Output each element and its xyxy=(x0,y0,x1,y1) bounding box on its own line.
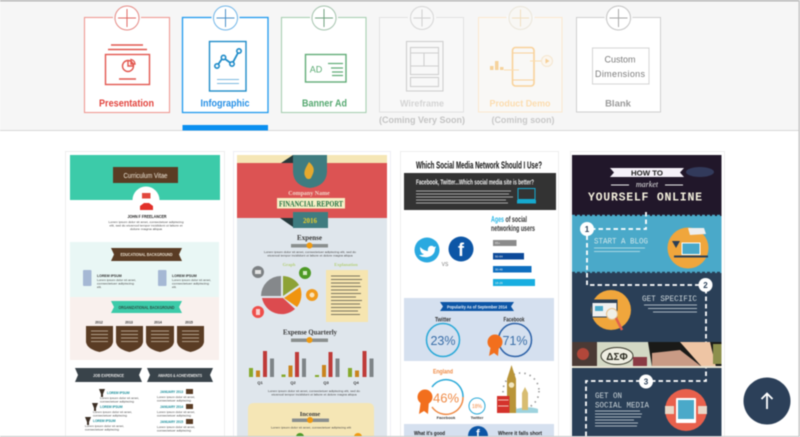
bar chart: ages: Ages of social xyxy=(491,215,527,224)
explanation box xyxy=(326,262,368,322)
section: experience and awards: consectetuer adipiscing xyxy=(157,414,191,418)
dashed route with step markers: 3 xyxy=(644,378,649,386)
section: get on social media xyxy=(595,389,707,431)
panel: good and short: What it's good xyxy=(414,431,445,437)
icon: phone with chart xyxy=(490,48,552,86)
icon: plus circle xyxy=(506,6,534,30)
dark header: HOW TO xyxy=(631,170,664,178)
section: experience and awards: consectetuer adipiscing xyxy=(157,428,191,432)
template: Social Media Network xyxy=(400,152,558,437)
bar chart: ages xyxy=(491,215,535,286)
dark intro box xyxy=(404,173,556,210)
template: Curriculum Vitae xyxy=(66,152,224,437)
section: education: consectetuer adipiscing xyxy=(172,282,209,286)
name and intro: JOHN F FREELANCER xyxy=(128,214,167,219)
section: experience and awards: JANUARY 2013 xyxy=(160,390,183,394)
vs label: VS xyxy=(442,262,449,268)
label: Banner Ad: Banner Ad xyxy=(302,98,347,110)
name and intro: Lorem ipsum dolor sit amet, consectetuer adipiscing xyxy=(108,220,184,224)
name and intro: dolore magna aliqua xyxy=(130,227,162,231)
section: experience and awards: consectetuer adipiscing xyxy=(93,414,127,418)
section: start a blog xyxy=(572,216,722,273)
dark header: YOURSELF ONLINE xyxy=(588,192,702,204)
section: experience and awards: JANUARY 2015 xyxy=(160,420,183,424)
card: Presentation xyxy=(84,6,170,112)
section: education: EDUCATIONAL BACKGROUND xyxy=(120,252,173,257)
section: education: elit. xyxy=(97,285,102,289)
header toolbar xyxy=(0,0,800,131)
section: get on social media: GET ON xyxy=(595,392,622,401)
title ribbon xyxy=(113,167,178,183)
section: get on social media: SOCIAL MEDIA xyxy=(595,402,649,410)
England statistics: England xyxy=(433,368,453,376)
section: experience and awards: JANUARY 2014 xyxy=(160,405,183,409)
icon: plus circle xyxy=(212,6,240,30)
bar chart: ages: networking users xyxy=(491,224,535,233)
section: organizational: 2013 xyxy=(125,320,133,324)
section: experience and awards: JOB EXPERIENCE xyxy=(93,373,124,378)
section: education: Lorem ipsum dolor sit amet, xyxy=(172,278,211,282)
report title: FINANCIAL REPORT xyxy=(279,198,343,208)
name and intro xyxy=(108,214,184,231)
section: experience and awards: AWARDS & ACHIEVEMENTS xyxy=(158,373,202,378)
label: Blank: Blank xyxy=(605,98,632,110)
report title xyxy=(277,191,345,208)
section: organizational: 2012 xyxy=(95,320,103,324)
section: organizational xyxy=(70,297,219,360)
icon: plus circle xyxy=(310,6,338,30)
teal header xyxy=(70,155,220,200)
heading: Expense: eiusmod tempor incididunt ut labore et dolore magna aliqua xyxy=(268,254,353,258)
illustration: London skyline xyxy=(497,365,539,413)
card: Infographic (active) xyxy=(182,6,268,112)
year tag: 2016 xyxy=(303,217,318,225)
bar chart: ages: 30-49 xyxy=(495,268,503,272)
England statistics: Twitter xyxy=(471,415,484,420)
section: education xyxy=(70,242,219,297)
card: Product Demo (disabled) xyxy=(478,6,562,126)
icon: facebook: f xyxy=(458,240,465,260)
bar chart: ages: 65+ xyxy=(495,241,500,245)
heading: Expense Quarterly: Expense Quarterly xyxy=(283,328,337,336)
income panel: Lorem ipsum dolor sit amet, consectetuer adipiscing elit xyxy=(271,426,351,430)
panel: popularity: 23% xyxy=(430,334,456,348)
section: education: LOREM IPSUM xyxy=(97,274,122,278)
section: organizational: 2014 xyxy=(154,320,162,324)
teal shield with flame xyxy=(281,155,327,188)
pie chart: Graph xyxy=(283,262,296,267)
panel: popularity: Popularity As of September 2014 xyxy=(447,304,507,310)
label: Infographic: Infographic xyxy=(200,98,250,110)
heading: Expense: Expense xyxy=(297,234,322,242)
bar chart: quarterly expense: Q3 xyxy=(323,380,329,385)
bar chart: quarterly expense: Q2 xyxy=(290,380,296,385)
panel: popularity xyxy=(404,298,554,361)
section: experience and awards: Lorem ipsum dolor sit amet, xyxy=(157,395,195,399)
dashed route with step markers: 1 xyxy=(585,225,590,234)
England statistics xyxy=(418,368,485,420)
England statistics: 18% xyxy=(472,404,483,410)
section: experience and awards: Lorem ipsum dolor sit amet, xyxy=(157,410,195,414)
custom dimensions box: Custom xyxy=(604,54,636,64)
label: coming soon: (Coming soon) xyxy=(492,115,554,126)
section: experience and awards: Lorem ipsum dolor sit amet, xyxy=(85,424,124,428)
panel: popularity: Facebook xyxy=(504,318,525,324)
section: education: elit. xyxy=(172,285,177,289)
title ribbon: Curriculum Vitae xyxy=(124,171,168,180)
section: start a blog: START A BLOG xyxy=(594,238,648,246)
icon: twitter xyxy=(414,238,440,262)
template: Financial Report xyxy=(234,152,390,437)
section: education: consectetuer adipiscing xyxy=(97,282,134,286)
dashed route with step markers: 2 xyxy=(703,281,708,290)
title: Which Social Media Network Should I Use? xyxy=(416,160,542,172)
bar chart: quarterly expense: Lorem ipsum dolor sit amet, consectetuer adipiscing elit, sed do xyxy=(268,389,360,393)
card: Wireframe (disabled) xyxy=(379,6,465,126)
panel: good and short xyxy=(404,424,554,437)
section: education: Lorem ipsum dolor sit amet, xyxy=(97,278,136,282)
heading: Expense: Lorem ipsum dolor sit amet, consectetuer adipiscing elit, sed do xyxy=(264,250,356,254)
label: Wireframe: Wireframe xyxy=(400,98,444,110)
card: Blank xyxy=(576,6,660,112)
section: experience and awards: consectetuer adipiscing xyxy=(85,428,119,432)
label: coming very soon: (Coming Very Soon) xyxy=(379,115,465,126)
section: organizational: 2015 xyxy=(185,320,193,324)
icon: ad banner: AD xyxy=(310,64,323,74)
section: experience and awards: consectetuer adipiscing xyxy=(100,400,134,404)
section: experience and awards xyxy=(75,368,213,432)
bar chart: ages: 50-64 xyxy=(495,254,503,258)
icon: line chart document xyxy=(210,42,246,91)
photo strip xyxy=(572,342,722,368)
icon: plus circle xyxy=(408,6,436,30)
panel: popularity: 71% xyxy=(502,334,528,348)
label: Presentation: Presentation xyxy=(99,98,154,110)
report title: Company Name xyxy=(288,191,330,197)
section: experience and awards: Lorem ipsum dolor sit amet, xyxy=(157,425,195,429)
icon: wireframe layout xyxy=(406,42,443,91)
icon: presentation screen xyxy=(106,45,150,84)
red banner xyxy=(237,163,387,218)
bar chart: quarterly expense: Q4 xyxy=(353,380,359,385)
card: Banner Ad xyxy=(282,6,366,112)
icon: plus circle xyxy=(113,6,141,30)
dashed route with step markers xyxy=(580,212,712,437)
section: experience and awards: consectetuer adipiscing xyxy=(157,398,191,402)
explanation box: Explanation xyxy=(334,262,358,267)
panel: good and short: Where it falls short xyxy=(498,431,542,437)
England statistics: Facebook xyxy=(437,415,456,420)
year tag xyxy=(280,212,328,228)
custom dimensions box: Dimensions xyxy=(595,69,646,79)
label: Product Demo: Product Demo xyxy=(490,98,551,110)
photo strip: ΔΣΦ xyxy=(606,352,628,363)
section: experience and awards: LOREM IPSUM xyxy=(93,419,116,423)
section: experience and awards: LOREM IPSUM xyxy=(100,405,123,409)
back to top button xyxy=(744,378,790,424)
active tab indicator xyxy=(182,125,268,130)
pie chart xyxy=(252,262,318,318)
section: experience and awards: LOREM IPSUM xyxy=(107,391,130,395)
income panel xyxy=(248,403,374,437)
section: experience and awards: Lorem ipsum dolor sit amet, xyxy=(93,410,132,414)
section: experience and awards: Lorem ipsum dolor sit amet, xyxy=(100,396,139,400)
bar chart: quarterly expense: eiusmod tempor incididunt ut labore et dolore magna aliqua xyxy=(272,392,357,396)
bar chart: quarterly expense: Q1 xyxy=(257,380,263,385)
panel: popularity: Twitter xyxy=(435,318,452,324)
section: get specific xyxy=(572,272,722,437)
bar chart: ages: 18-29 xyxy=(495,281,503,285)
section: organizational: ORGANIZATIONAL BACKGROUND xyxy=(118,305,175,310)
dark header: market xyxy=(636,180,659,189)
icon: facebook xyxy=(448,236,474,262)
icon: plus circle xyxy=(604,6,632,30)
England statistics: 46% xyxy=(433,390,459,406)
income panel: Income xyxy=(300,411,320,418)
name and intro: elit, sed do eiusmod tempor incididunt ut labore et xyxy=(110,224,183,228)
avatar xyxy=(132,186,160,214)
dark intro box: Facebook, Twitter...Which social media site is better? xyxy=(416,180,534,186)
bar chart: quarterly expense xyxy=(249,351,374,396)
heading: Expense Quarterly xyxy=(283,328,337,343)
section: get specific: GET SPECIFIC xyxy=(642,295,697,304)
custom dimensions box xyxy=(592,48,649,84)
section: education: LOREM IPSUM xyxy=(172,274,197,278)
dark header xyxy=(572,155,722,216)
heading: Expense xyxy=(264,234,356,258)
template: Market Yourself Online xyxy=(570,152,724,437)
